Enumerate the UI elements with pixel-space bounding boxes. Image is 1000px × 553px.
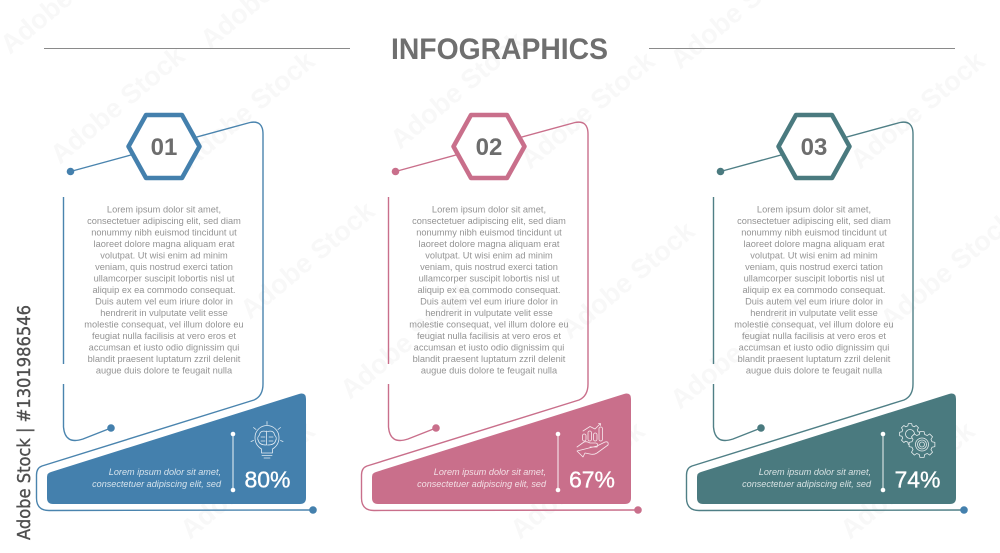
panel: step 03 [686, 115, 968, 514]
body text 02: aliquip ex ea commodo consequat. [418, 285, 560, 295]
body text 02: feugiat nulla facilisis at vero eros et [417, 331, 561, 341]
hexagon badge 02: 02 [476, 134, 502, 161]
body text 03: consectetuer adipiscing elit, sed diam [737, 216, 891, 226]
body text 02: laoreet dolore magna aliquam erat [419, 239, 560, 249]
body text 01: augue duis dolore te feugait nulla [96, 366, 233, 376]
watermark pattern: Adobe Stock [515, 45, 661, 175]
caption 01: Lorem ipsum dolor sit amet, [109, 467, 221, 477]
body text 02: hendrerit in vulputate velit esse [425, 308, 553, 318]
body text 03: Lorem ipsum dolor sit amet, [757, 204, 871, 214]
body text 01: blandit praesent luptatum zzril delenit [88, 354, 241, 364]
body text 02: nonummy nibh euismod tincidunt ut [416, 228, 562, 238]
divider 03 [881, 432, 885, 492]
body text 03: laoreet dolore magna aliquam erat [744, 239, 885, 249]
icon: hand holding chart [577, 424, 608, 457]
body text 01: molestie consequat, vel illum dolore eu [84, 320, 244, 330]
watermark pattern: Adobe Stock [175, 45, 321, 175]
body text 03: molestie consequat, vel illum dolore eu [734, 320, 894, 330]
stock id sidebar text: Adobe Stock | #1301986546 [15, 305, 35, 540]
hexagon badge 01 [128, 115, 200, 178]
outline connector 03 [686, 122, 968, 514]
panel: step 02 [362, 115, 642, 514]
watermark pattern: Adobe Stock [175, 415, 321, 545]
body text 02: consectetuer adipiscing elit, sed diam [412, 216, 566, 226]
body text 02: accumsan et iusto odio dignissim qui [414, 342, 564, 352]
body text 01: Lorem ipsum dolor sit amet, [107, 204, 221, 214]
watermark pattern: Adobe Stock [335, 275, 481, 405]
body text 02: Lorem ipsum dolor sit amet, [432, 204, 546, 214]
body text 01: ullamcorper suscipit lobortis nisl ut [94, 274, 235, 284]
body text 03: accumsan et iusto odio dignissim qui [739, 342, 889, 352]
value 80%: 80% [244, 466, 291, 492]
body text 01: Duis autem vel eum iriure dolor in [95, 296, 233, 306]
hexagon badge 03: 03 [801, 134, 827, 161]
body text 03: aliquip ex ea commodo consequat. [743, 285, 885, 295]
body text 01: aliquip ex ea commodo consequat. [93, 285, 235, 295]
caption 01 [92, 467, 222, 489]
body text 01: hendrerit in vulputate velit esse [100, 308, 228, 318]
watermark pattern: Adobe Stock [665, 285, 811, 415]
body text 03: feugiat nulla facilisis at vero eros et [742, 331, 886, 341]
caption 03: Lorem ipsum dolor sit amet, [759, 467, 871, 477]
panel: step 01 [36, 115, 317, 514]
body text 02: ullamcorper suscipit lobortis nisl ut [419, 274, 560, 284]
body text 02: augue duis dolore te feugait nulla [421, 366, 558, 376]
body text 01: veniam, quis nostrud exerci tation [95, 262, 233, 272]
body text 01: laoreet dolore magna aliquam erat [94, 239, 235, 249]
watermark pattern: Adobe Stock [505, 415, 651, 545]
icon: gears [900, 424, 935, 457]
body text 03 [734, 204, 894, 376]
hexagon badge 01: 01 [151, 134, 177, 161]
divider 01 [231, 432, 235, 492]
value 74%: 74% [894, 466, 941, 492]
body text 03: veniam, quis nostrud exerci tation [745, 262, 883, 272]
caption 01: consectetuer adipiscing elit, sed [92, 479, 222, 489]
title with rules: INFOGRAPHICS [391, 33, 608, 66]
body text 03: ullamcorper suscipit lobortis nisl ut [744, 274, 885, 284]
hexagon badge 03 [778, 115, 850, 178]
watermark pattern: Adobe Stock [845, 45, 991, 175]
body text 02: molestie consequat, vel illum dolore eu [409, 320, 569, 330]
divider 02 [556, 432, 560, 492]
body text 01: accumsan et iusto odio dignissim qui [89, 342, 239, 352]
body text 01: nonummy nibh euismod tincidunt ut [91, 228, 237, 238]
watermark pattern: Adobe Stock [235, 195, 381, 325]
stat panel 03 [697, 394, 956, 504]
body text 03: augue duis dolore te feugait nulla [746, 366, 883, 376]
body text 02 [409, 204, 569, 376]
outline connector 02 [362, 122, 642, 514]
watermark pattern: Adobe Stock [45, 40, 191, 170]
caption 02: Lorem ipsum dolor sit amet, [434, 467, 546, 477]
hexagon badge 02 [454, 115, 524, 178]
icon: light bulb with brain [251, 422, 283, 458]
body text 01 [84, 204, 244, 376]
body text 03: Duis autem vel eum iriure dolor in [745, 296, 883, 306]
body text 02: veniam, quis nostrud exerci tation [420, 262, 558, 272]
body text 03: volutpat. Ut wisi enim ad minim [750, 250, 878, 260]
body text 02: blandit praesent luptatum zzril delenit [413, 354, 566, 364]
outline connector 01 [36, 122, 317, 514]
body text 03: hendrerit in vulputate velit esse [750, 308, 878, 318]
body text 01: feugiat nulla facilisis at vero eros et [92, 331, 236, 341]
body text 02: volutpat. Ut wisi enim ad minim [425, 250, 553, 260]
stat panel 01 [47, 394, 306, 504]
caption 03: consectetuer adipiscing elit, sed [742, 479, 872, 489]
value 67%: 67% [569, 466, 615, 492]
caption 02: consectetuer adipiscing elit, sed [417, 479, 547, 489]
watermark pattern: Adobe Stock [385, 25, 531, 155]
stat panel 02 [372, 394, 631, 504]
body text 01: consectetuer adipiscing elit, sed diam [87, 216, 241, 226]
body text 03: nonummy nibh euismod tincidunt ut [741, 228, 887, 238]
caption 03 [742, 467, 872, 489]
watermark pattern: Adobe Stock [835, 415, 981, 545]
caption 02 [417, 467, 547, 489]
watermark pattern: Adobe Stock [555, 215, 701, 345]
body text 03: blandit praesent luptatum zzril delenit [738, 354, 891, 364]
body text 01: volutpat. Ut wisi enim ad minim [100, 250, 228, 260]
body text 02: Duis autem vel eum iriure dolor in [420, 296, 558, 306]
